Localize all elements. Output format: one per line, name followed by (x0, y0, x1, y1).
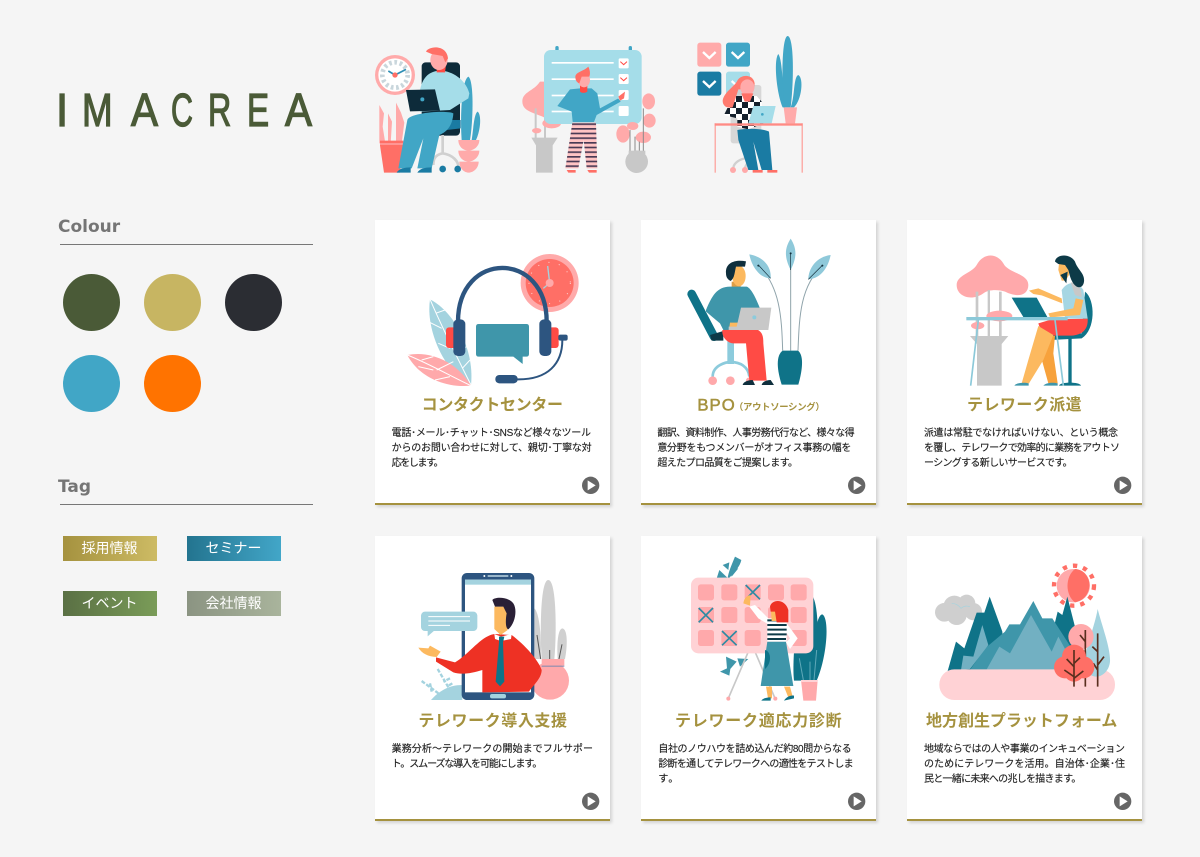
description (657, 426, 855, 469)
description: 地域ならではの人や事業のインキュベーション (924, 742, 1125, 755)
illustration: man with laptop on chair (375, 47, 480, 173)
tag: 採用情報: 採用情報 (82, 540, 138, 556)
play button (582, 793, 599, 810)
description: 意分野をもつメンバーがオフィス事務の幅を (657, 441, 851, 454)
description (392, 742, 593, 770)
title: テレワーク派遣 (967, 396, 1082, 414)
play button (848, 793, 865, 810)
play button (1114, 793, 1131, 810)
logo: IMACREA: M (82, 84, 113, 136)
description: ト。スムーズな導入を可能にします。 (392, 757, 542, 770)
description (658, 742, 854, 785)
panel: コンタクトセンター (375, 220, 610, 505)
description: 翻訳、資料制作、人事労務代行など、様々な得 (657, 426, 855, 439)
description (392, 426, 592, 469)
tag: 会社情報: 会社情報 (206, 595, 262, 611)
panel: テレワーク導入支援 (375, 536, 610, 821)
illustration: mountains, sun and trees (935, 566, 1115, 700)
swatch: gold (144, 274, 201, 331)
colour swatches (63, 274, 282, 412)
description: ーシングする新しいサービスです。 (924, 456, 1073, 469)
illustration: woman marking calendar board (691, 557, 827, 701)
title (697, 396, 825, 415)
section heading: Colour: Colour (58, 217, 120, 237)
section heading: Tag: Tag (58, 477, 91, 497)
title: テレワーク適応力診断 (675, 711, 842, 730)
illustration: woman at desk with check cards (697, 36, 803, 173)
title: 地方創生プラットフォーム (926, 711, 1117, 730)
description: 電話･メール･チャット･SNSなど様々なツール (392, 426, 591, 439)
tag: セミナー: セミナー (206, 540, 262, 556)
swatch: orange (144, 355, 201, 412)
description: 自社のノウハウを詰め込んだ約80問からなる (658, 742, 852, 755)
tag: 採用情報 (62, 536, 156, 561)
illustration: man with laptop and plant (692, 239, 831, 385)
play button (1114, 477, 1131, 494)
tag: セミナー (186, 536, 280, 561)
description (924, 426, 1120, 469)
play button (848, 477, 865, 494)
panel: テレワーク派遣 (907, 220, 1142, 505)
illustration: man in smartphone video call (418, 573, 569, 700)
illustration: headset with chat bubble (407, 254, 579, 386)
header illustrations (375, 36, 803, 173)
logo: IMACREA (56, 84, 313, 137)
description: 派遣は常駐でなければいけない、という概念 (924, 426, 1118, 439)
logo: IMACREA: C (171, 86, 193, 137)
description: す。 (658, 773, 678, 785)
tag: イベント: イベント (82, 595, 138, 611)
tags (63, 536, 281, 616)
swatch: charcoal (225, 274, 282, 331)
title: テレワーク導入支援 (418, 711, 567, 730)
description: 民と一緒に未来への兆しを描きます。 (924, 772, 1081, 785)
description: を覆し、テレワークで効率的に業務をアウトソ (924, 441, 1120, 454)
description: からのお問い合わせに対して、親切･丁寧な対 (392, 441, 592, 454)
swatch: blue (63, 355, 120, 412)
description: 応をします。 (392, 457, 444, 469)
title: （アウトソーシング） (734, 401, 825, 412)
illustration: woman at desk with laptop (957, 256, 1093, 386)
description: 業務分析～テレワークの開始までフルサポー (392, 742, 593, 755)
description: のためにテレワークを活用。自治体･企業･住 (924, 757, 1125, 770)
logo: IMACREA: A (131, 86, 158, 137)
tag: イベント (62, 591, 156, 616)
logo: IMACREA: R (208, 85, 231, 136)
illustration: man pointing at checklist (522, 46, 656, 173)
play button (582, 477, 599, 494)
description: 超えたプロ品質をご提案します。 (657, 456, 798, 469)
panel: テレワーク適応力診断 (641, 536, 876, 821)
description (924, 742, 1125, 785)
logo: IMACREA: I (56, 84, 68, 136)
title: BPO (697, 396, 735, 415)
swatch: dark green (63, 274, 120, 331)
title: コンタクトセンター (422, 396, 563, 414)
panel: BPO (641, 220, 876, 505)
logo: IMACREA: E (247, 86, 269, 136)
panel: 地方創生プラットフォーム (907, 536, 1142, 821)
tag: 会社情報 (186, 591, 280, 616)
logo: IMACREA: A (285, 86, 312, 137)
description: 診断を通してテレワークへの適性をテストしま (658, 757, 854, 770)
